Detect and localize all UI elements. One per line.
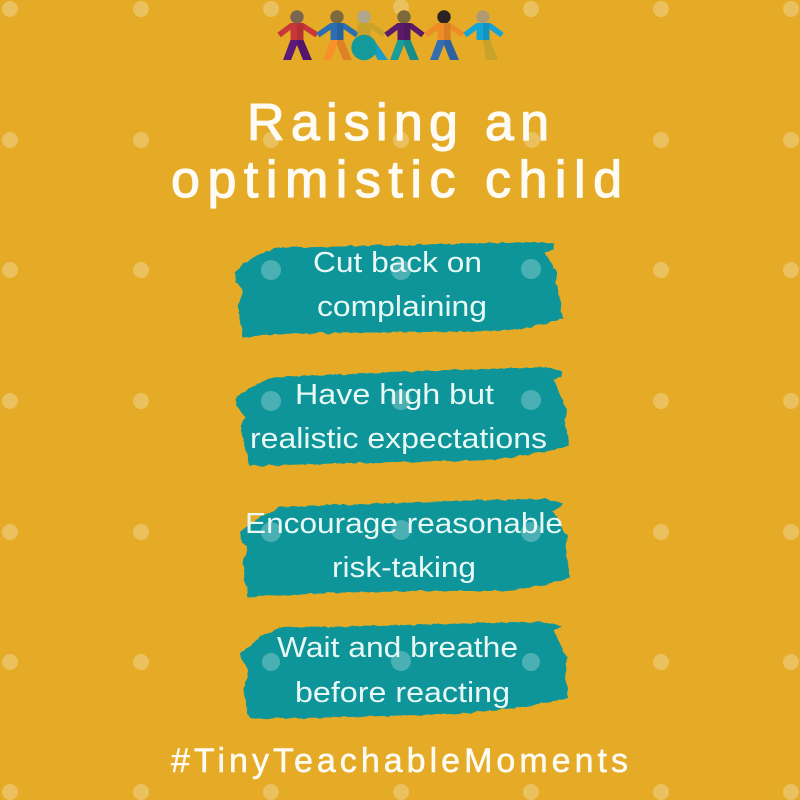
title: Raising an	[247, 94, 549, 152]
text: wait and breathe before reacting: Wait and breathe	[277, 632, 518, 664]
brush panel 4	[240, 622, 569, 719]
text: have high but realistic expectations	[250, 379, 547, 455]
text: have high but realistic expectations: Have high but	[295, 379, 494, 411]
text: encourage reasonable risk-taking	[245, 508, 563, 584]
text: cut back on complaining: Cut back on	[313, 247, 482, 279]
text: wait and breathe before reacting: before reacting	[295, 677, 510, 709]
text: have high but realistic expectations: realistic expectations	[250, 423, 547, 455]
text: wait and breathe before reacting	[277, 632, 518, 709]
icon: paper-chain people	[279, 10, 502, 60]
text: cut back on complaining	[313, 247, 487, 323]
text: encourage reasonable risk-taking: risk-taking	[332, 552, 476, 584]
text: cut back on complaining: complaining	[317, 291, 487, 323]
title: optimistic child	[171, 151, 622, 209]
brush panel 2	[235, 367, 570, 466]
title	[171, 94, 622, 209]
hashtag: #TinyTeachableMoments	[171, 742, 628, 780]
brush panel 1	[235, 242, 563, 337]
brush panel 3	[240, 499, 569, 597]
text: encourage reasonable risk-taking: Encourage reasonable	[245, 508, 563, 540]
